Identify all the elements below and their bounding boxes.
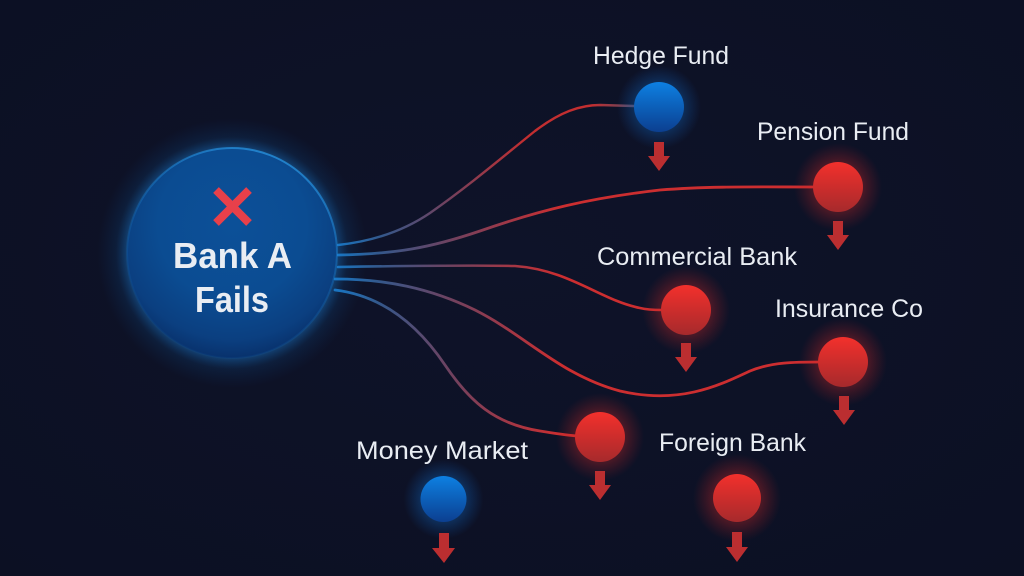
node: unlabelled red <box>556 393 644 481</box>
arrow: Money Market down <box>432 533 455 563</box>
line to Money Market node <box>335 290 577 436</box>
node: Pension Fund <box>757 118 909 231</box>
label: Commercial Bank <box>597 243 798 271</box>
label: Foreign Bank <box>659 429 806 457</box>
node: Foreign Bank <box>659 429 806 542</box>
label: Insurance Co <box>775 295 923 323</box>
line to Insurance Co <box>335 279 820 396</box>
label: Fails: Fails <box>195 279 269 320</box>
line to Pension Fund <box>338 187 815 255</box>
arrow: Foreign Bank down <box>726 532 748 562</box>
arrow: Pension Fund down <box>827 221 849 250</box>
arrow: Hedge Fund down <box>648 142 670 171</box>
label: Money Market <box>356 437 528 465</box>
label: Hedge Fund <box>593 42 729 70</box>
connection lines <box>335 105 820 436</box>
arrow: unlabelled red down <box>589 471 611 500</box>
node: Commercial Bank <box>597 243 798 354</box>
icon: red X <box>216 190 249 223</box>
label: Pension Fund <box>757 118 909 146</box>
arrow: Commercial Bank down <box>675 343 697 372</box>
node: Money Market <box>356 437 528 539</box>
arrow: Insurance Co down <box>833 396 855 425</box>
line to Commercial Bank <box>338 266 662 310</box>
line to Hedge Fund <box>338 105 634 245</box>
node: Bank A <box>97 118 367 388</box>
label: Bank A: Bank A <box>173 235 292 276</box>
node: Insurance Co <box>775 295 923 406</box>
node: Hedge Fund <box>593 42 729 149</box>
